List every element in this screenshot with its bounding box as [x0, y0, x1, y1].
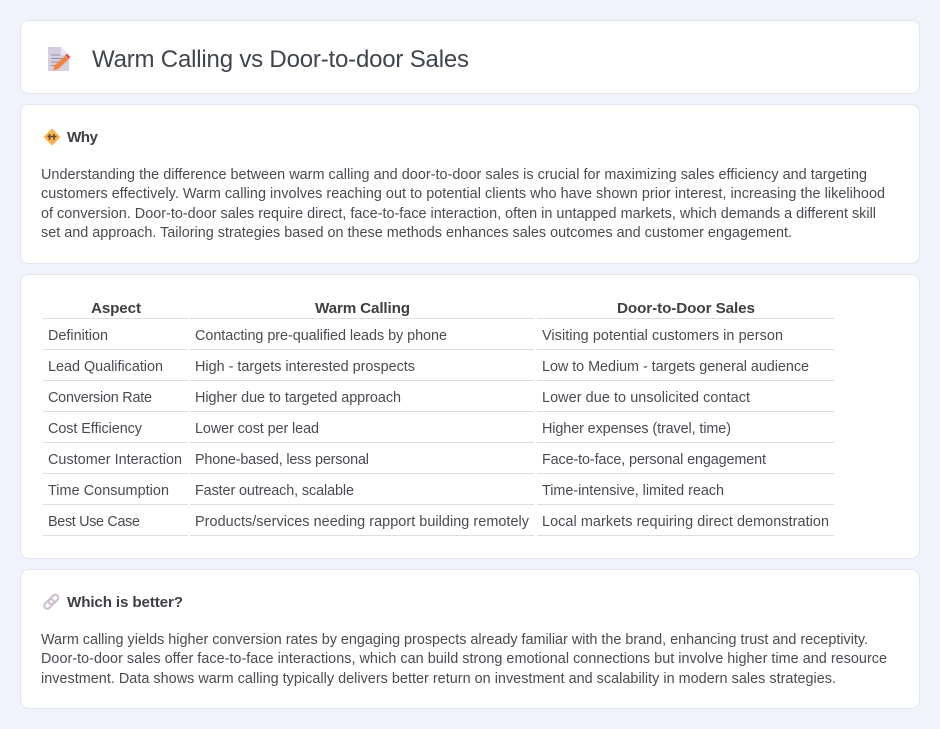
table row: cost efficiency	[48, 421, 731, 437]
text block: which is better paragraph: investment. Data shows warm calling typically delivers better return on investment and scalability in modern sales strategies.	[41, 671, 836, 687]
title: Warm Calling vs Door-to-door Sales	[92, 46, 469, 73]
table row: best use case	[48, 514, 829, 530]
table row: customer interaction: Phone-based, less personal	[195, 452, 369, 468]
table row: best use case: Products/services needing rapport building remotely	[195, 514, 530, 530]
table header row: Warm Calling	[315, 300, 410, 317]
table row: cost efficiency: Cost Efficiency	[48, 421, 143, 437]
table row: customer interaction	[48, 452, 766, 468]
text block: why paragraph: customers effectively. Warm calling involves reaching out to potential clients who have shown prior interest, increasing the likelihood	[41, 186, 885, 202]
table row: cost efficiency: Higher expenses (travel, time)	[542, 421, 731, 437]
table row: definition	[48, 328, 783, 344]
panel: comparison table	[20, 274, 920, 558]
table header row: Door-to-Door Sales	[617, 300, 755, 317]
text block: why paragraph: Understanding the difference between warm calling and door-to-door sales is crucial for maximizing sales efficiency and targeting	[41, 167, 867, 183]
text block: which is better paragraph: Door-to-door sales offer face-to-face interactions, which can build strong emotional connections but involve higher time and resource	[41, 651, 887, 667]
table row: definition: Definition	[48, 328, 108, 344]
table row: time consumption: Time Consumption	[48, 483, 169, 499]
table row: definition: Visiting potential customers in person	[542, 328, 783, 344]
text block: why paragraph: of conversion. Door-to-door sales require direct, face-to-face interaction, often in untapped markets, which demands a different skill	[41, 206, 876, 222]
text block: why paragraph	[41, 167, 885, 241]
table row: lead qualification: Low to Medium - targets general audience	[542, 359, 809, 375]
table header row: Aspect	[91, 300, 141, 317]
text block: which is better paragraph	[41, 632, 887, 687]
table row: lead qualification: High - targets interested prospects	[195, 359, 415, 375]
table row: cost efficiency: Lower cost per lead	[195, 421, 319, 437]
heading: which is better: Which is better?	[67, 594, 183, 611]
text block: which is better paragraph: Warm calling yields higher conversion rates by engaging prospects already familiar with the brand, enhancing trust and receptivity.	[41, 632, 868, 648]
icon: document with pencil	[48, 47, 70, 71]
table row: time consumption: Faster outreach, scalable	[195, 483, 354, 499]
table row: time consumption: Time-intensive, limited reach	[542, 483, 724, 499]
panel: title header	[20, 20, 920, 94]
table row: conversion rate: Higher due to targeted approach	[195, 390, 401, 406]
icon: diamond sign	[44, 128, 60, 146]
table row: best use case: Best Use Case	[48, 514, 140, 530]
table row: conversion rate	[48, 390, 750, 406]
table header row	[91, 300, 755, 317]
table row: conversion rate: Lower due to unsolicited contact	[542, 390, 750, 406]
icon: chain link	[43, 593, 60, 610]
table row: time consumption	[48, 483, 724, 499]
table row: lead qualification: Lead Qualification	[48, 359, 163, 375]
heading: why: Why	[67, 129, 99, 146]
panel: which is better	[20, 570, 920, 708]
table row: definition: Contacting pre-qualified leads by phone	[195, 328, 447, 344]
table row: conversion rate: Conversion Rate	[48, 390, 152, 406]
panel: why	[20, 104, 920, 264]
table row: customer interaction: Face-to-face, personal engagement	[542, 452, 766, 468]
table row: best use case: Local markets requiring direct demonstration	[542, 514, 829, 530]
table row: customer interaction: Customer Interaction	[48, 452, 182, 468]
text block: why paragraph: set and approach. Tailoring strategies based on these methods enhances sales outcomes and customer engagement.	[41, 225, 792, 241]
table row: lead qualification	[48, 359, 809, 375]
